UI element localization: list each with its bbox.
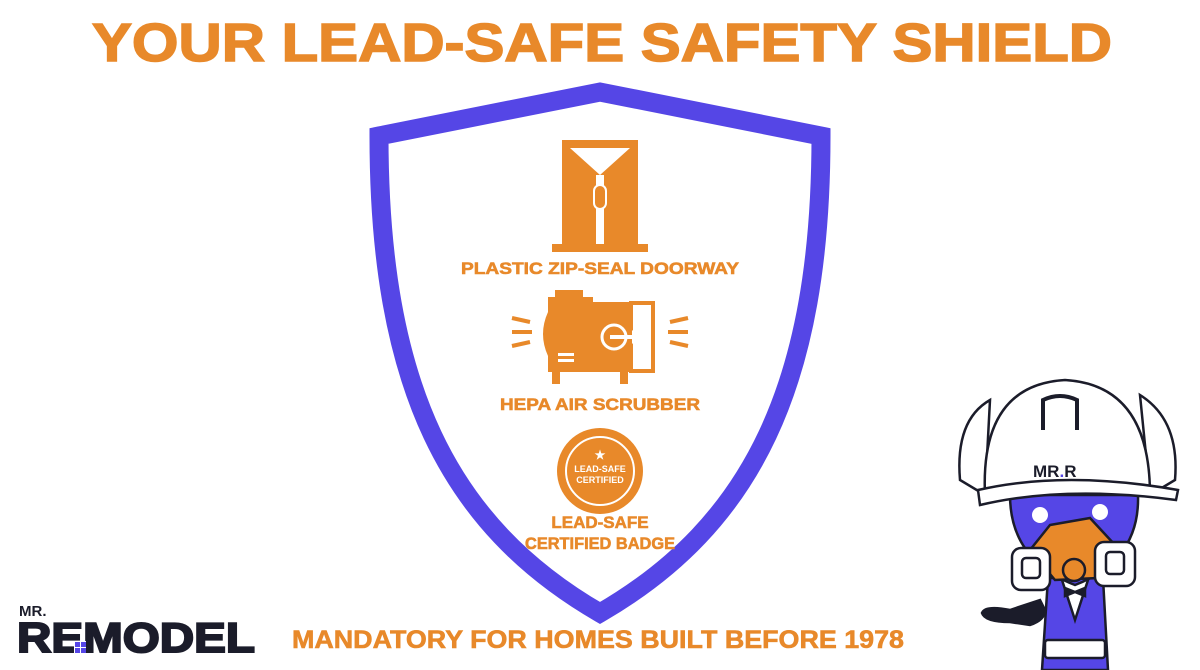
respirator [1030,518,1115,580]
footer text: MANDATORY FOR HOMES BUILT BEFORE 1978 [292,626,904,654]
panel: shield: CERTIFIED BADGE [525,534,675,553]
mascot: Mr. R in hard hat and respirator: MR.R [1033,462,1076,481]
ear muffs [959,400,990,495]
icon: certified badge: LEAD-SAFE [574,464,626,474]
panel: shield [379,92,821,613]
logo: Mr. Remodel: REMODEL [17,614,255,661]
logo: Mr. Remodel: MR. [19,603,46,620]
label: zip-seal doorway: PLASTIC ZIP-SEAL DOORWAY [461,259,740,278]
label: certified badge: LEAD-SAFE [551,513,649,532]
icon: HEPA air scrubber [512,290,688,384]
icon: certified badge [557,428,643,514]
helmet [985,380,1150,495]
mascot: Mr. R in hard hat and respirator [959,380,1178,670]
pointing hand [982,600,1045,625]
face [1010,495,1138,585]
icon: zip-seal doorway [552,140,648,252]
icon: certified badge: ★ [595,448,606,462]
vest body [1042,578,1108,670]
icon: certified badge: CERTIFIED [576,475,624,485]
belt [1045,640,1105,658]
label: HEPA air scrubber: HEPA AIR SCRUBBER [500,395,700,414]
title: YOUR LEAD-SAFE SAFETY SHIELD [92,13,1112,73]
